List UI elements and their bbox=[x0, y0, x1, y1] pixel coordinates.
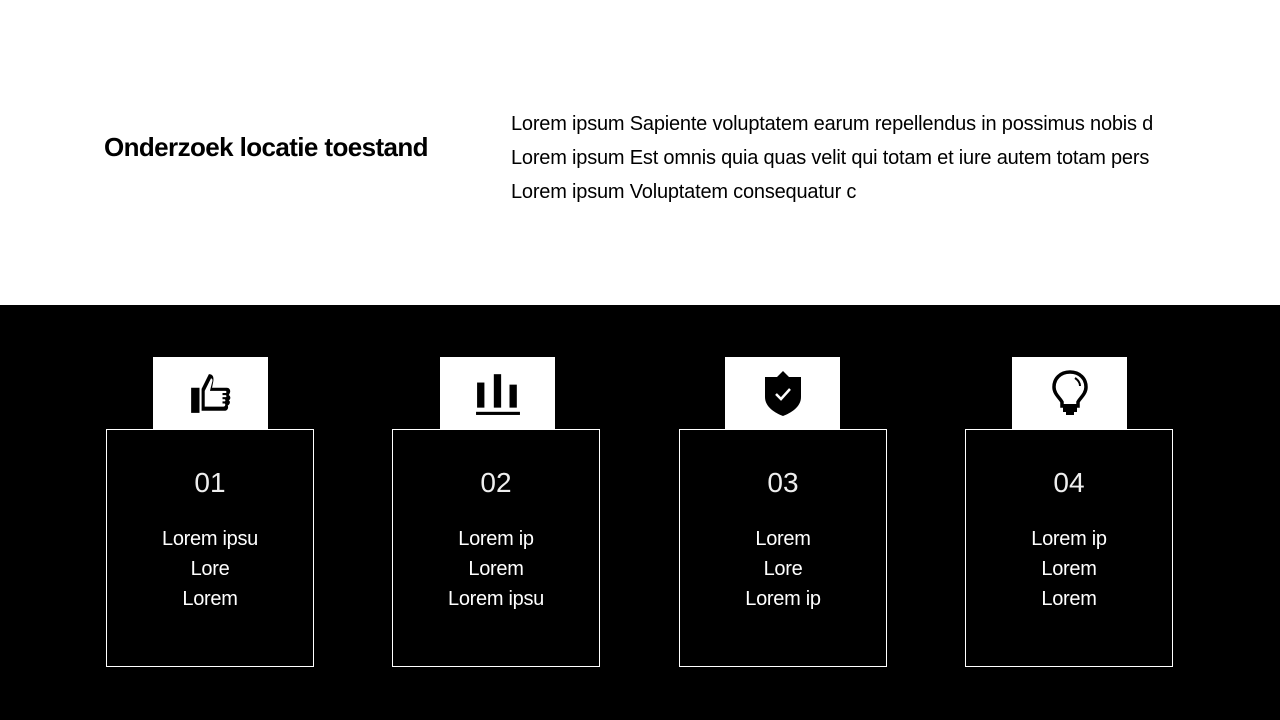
icon: thumbs up bbox=[153, 357, 268, 429]
panel: card 01: 01 bbox=[194, 467, 226, 498]
panel: card 02: 02 bbox=[480, 467, 512, 498]
panel: card 03: Lorem ip bbox=[745, 588, 821, 610]
panel: card 02: Lorem ip bbox=[458, 528, 534, 550]
panel: card 03: 03 bbox=[767, 467, 799, 498]
text block: intro: Lorem ipsum Voluptatem consequatur c bbox=[511, 181, 856, 203]
panel: card 03: Lore bbox=[764, 558, 802, 580]
panel: card 01 bbox=[106, 429, 314, 667]
panel: card 04: Lorem bbox=[1041, 558, 1097, 580]
text block: intro: Lorem ipsum Est omnis quia quas velit qui totam et iure autem totam pers bbox=[511, 147, 1149, 169]
panel: card 01: Lore bbox=[191, 558, 229, 580]
panel: card 02: Lorem ipsu bbox=[448, 588, 544, 610]
text block: intro: Lorem ipsum Sapiente voluptatem earum repellendus in possimus nobis d bbox=[511, 113, 1153, 135]
panel: card 03 bbox=[679, 429, 887, 667]
icon: light bulb bbox=[1012, 357, 1127, 429]
panel: dark band bbox=[0, 305, 1280, 720]
panel: card 04: 04 bbox=[1053, 467, 1085, 498]
panel: card 04 bbox=[965, 429, 1173, 667]
panel: card 01: Lorem ipsu bbox=[162, 528, 258, 550]
text block: intro bbox=[511, 113, 1153, 203]
icon: shield bbox=[725, 357, 840, 429]
title: Onderzoek locatie toestand bbox=[104, 132, 428, 162]
panel: card 04: Lorem ip bbox=[1031, 528, 1107, 550]
panel: card 02 bbox=[392, 429, 600, 667]
panel: card 02: Lorem bbox=[468, 558, 524, 580]
icon: bar chart bbox=[440, 357, 555, 429]
panel: card 03: Lorem bbox=[755, 528, 811, 550]
panel: card 04: Lorem bbox=[1041, 588, 1097, 610]
panel: card 01: Lorem bbox=[182, 588, 238, 610]
